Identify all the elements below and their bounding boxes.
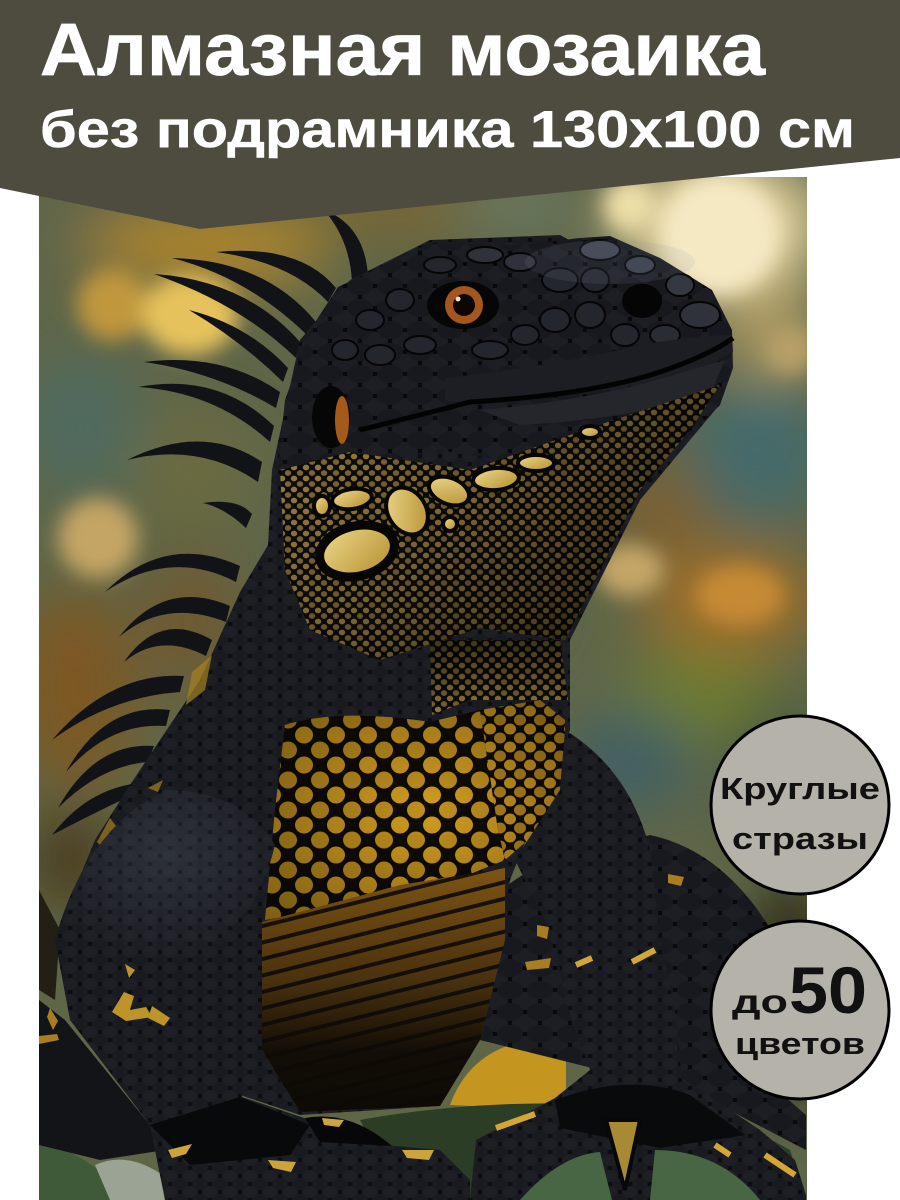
tail behind left arm <box>39 890 165 1160</box>
left claws <box>150 1097 310 1165</box>
badge: up to 50 colours <box>711 921 889 1099</box>
badge: round rhinestones <box>711 716 889 894</box>
icon: nostril <box>622 284 662 318</box>
large gold scales <box>314 426 600 584</box>
neck and torso <box>60 235 715 1115</box>
upper lip band <box>445 335 733 402</box>
mouth line <box>360 338 733 430</box>
header banner <box>0 0 900 229</box>
spines along the back <box>52 210 368 835</box>
right arm <box>470 730 806 1200</box>
gold flecks on forearm <box>112 964 170 1026</box>
left shoulder and arm <box>55 790 470 1200</box>
iguana illustration <box>39 210 806 1200</box>
shoulder highlight <box>78 790 260 930</box>
head <box>278 236 733 470</box>
belly <box>262 868 505 1112</box>
lower jaw highlight <box>480 360 725 425</box>
large head scales <box>332 240 720 365</box>
right claws <box>555 1085 745 1148</box>
photo: blurred bokeh background <box>15 155 830 1200</box>
badge: up to 50 colours: 50 <box>789 953 867 1027</box>
chest gold scales <box>265 700 565 920</box>
icon: eye <box>427 281 499 329</box>
icon: ear <box>312 386 350 448</box>
gold neck scales <box>430 640 568 715</box>
subtitle: без подрамника 130х100 см <box>40 101 855 159</box>
leaf between right toes <box>520 1150 760 1200</box>
leaves and foreground <box>39 1040 806 1200</box>
gold flecks on back <box>97 655 212 848</box>
highlight on snout <box>525 240 695 284</box>
badge: up to 50 colours: до <box>732 983 788 1020</box>
throat with gold scales <box>280 385 720 660</box>
tail behind right arm <box>480 835 806 1150</box>
badge: round rhinestones: Круглые <box>720 771 880 806</box>
title: Алмазная мозаика <box>40 8 766 91</box>
badge: up to 50 colours: цветов <box>735 1026 865 1061</box>
badge: round rhinestones: стразы <box>732 821 868 856</box>
